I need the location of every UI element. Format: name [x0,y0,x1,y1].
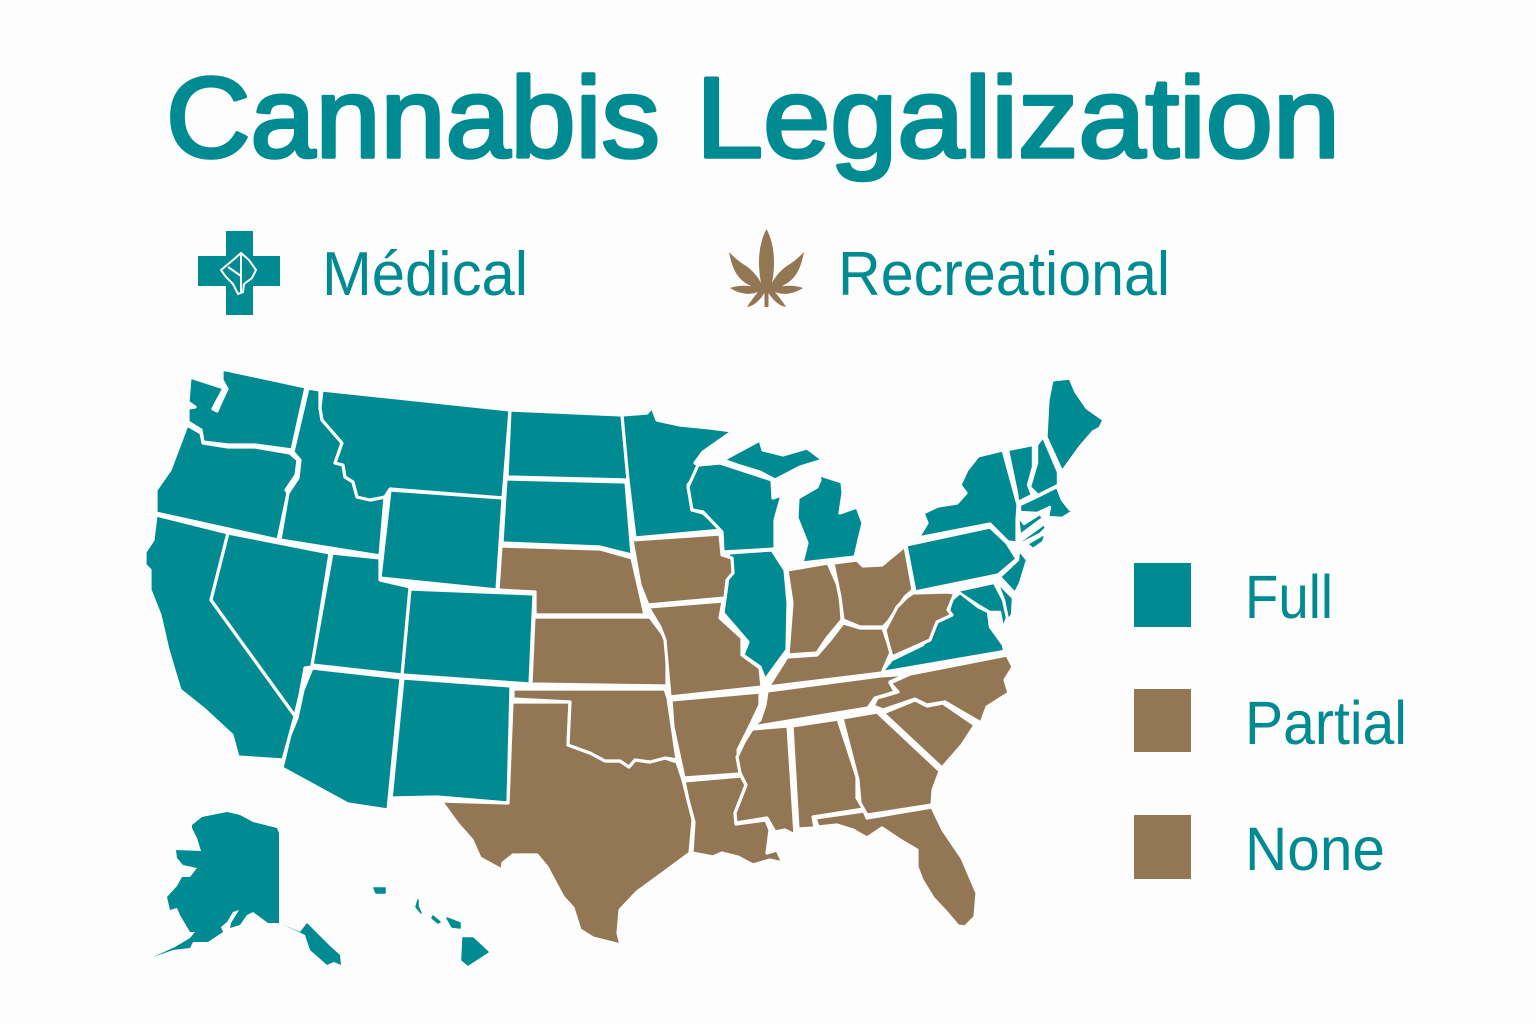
legend: status key [1134,563,1407,883]
swatch: none [1134,815,1191,879]
title [166,55,1340,182]
icon: cannabis leaf [729,229,804,307]
label: full: Full [1245,563,1333,631]
swatch: partial [1134,689,1191,752]
map of the United States [145,369,1104,965]
title: Cannabis [166,55,660,182]
medical label: Médical [322,240,528,309]
Alaska [153,812,279,957]
states: full legalization [145,369,1104,810]
legend: medical and recreational [198,229,1170,315]
icon: medical cross [198,231,280,315]
label: partial: Partial [1245,689,1407,757]
Alaska panhandle [282,923,341,965]
Hawaii [374,888,488,965]
title: Legalization [696,55,1340,182]
swatch: full [1134,563,1191,627]
states: partial or no legalization [441,534,1013,945]
label: none: None [1245,815,1385,883]
recreational label: Recreational [838,240,1170,309]
